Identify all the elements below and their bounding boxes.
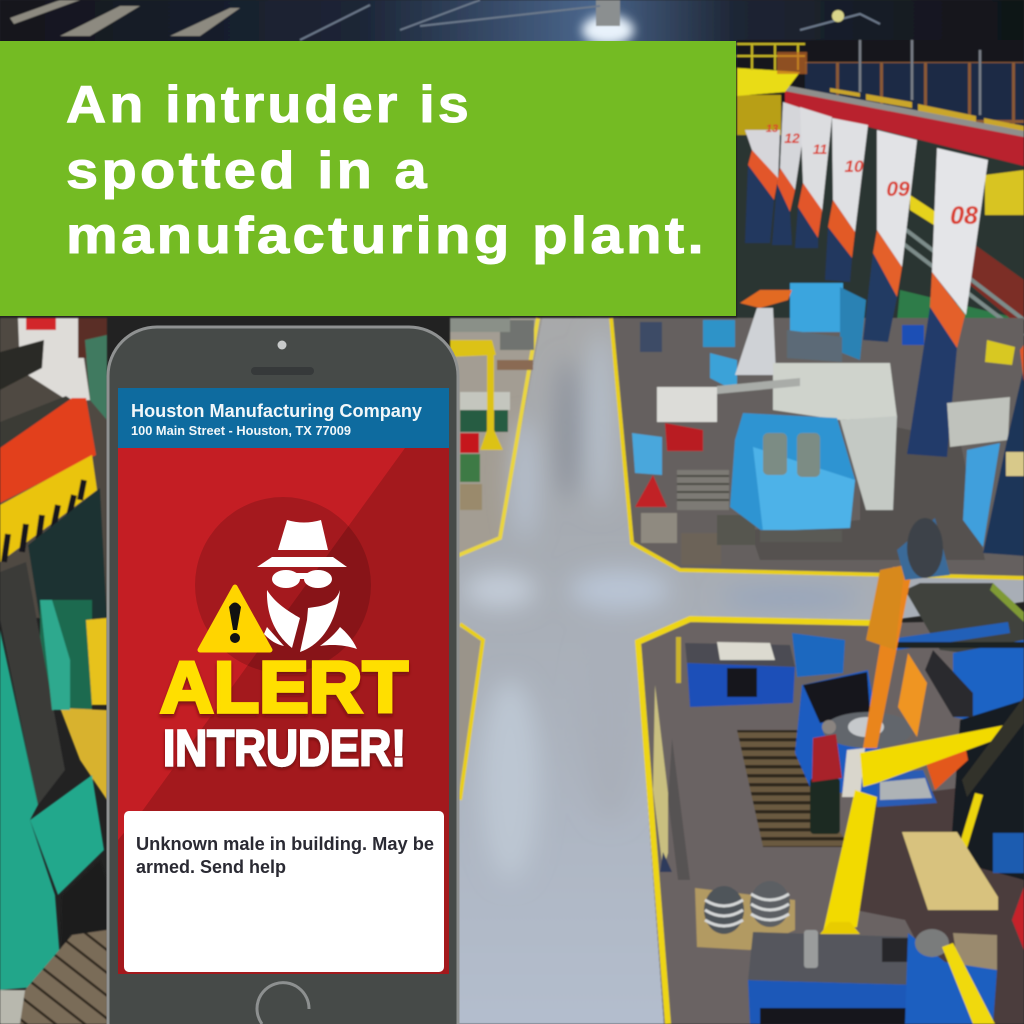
workbench with blue drawers xyxy=(676,633,845,707)
numbered factory columns xyxy=(737,95,988,457)
icon: warning triangle xyxy=(200,587,270,650)
lower right zone floor xyxy=(636,618,1024,1024)
left upper floor zone xyxy=(450,318,542,565)
column 09: 09 xyxy=(886,178,910,201)
column 10: 10 xyxy=(845,157,864,176)
company header: Houston Manufacturing Company xyxy=(131,401,422,421)
column 12: 12 xyxy=(784,130,800,146)
phone xyxy=(108,327,458,1024)
column 13 xyxy=(737,95,781,243)
column 08 xyxy=(907,148,988,457)
lower blue workbench xyxy=(748,929,997,1024)
column 11: 11 xyxy=(813,141,827,157)
pallet with metal rings xyxy=(695,881,795,950)
yellow crane platform xyxy=(737,44,807,96)
right side machines xyxy=(902,325,1024,556)
phone speaker xyxy=(251,367,314,375)
title text: spotted in a xyxy=(66,142,430,200)
barrier xyxy=(653,685,690,880)
machinery: upper middle xyxy=(450,318,534,510)
message box: armed. Send help xyxy=(136,857,286,877)
column 09 xyxy=(863,130,917,342)
red cabinet edge xyxy=(1012,887,1024,950)
upper gallery windows xyxy=(805,62,1024,140)
phone camera xyxy=(278,340,286,350)
column 11 xyxy=(795,107,832,248)
machinery: blue machines xyxy=(632,283,897,565)
interior behind columns xyxy=(737,95,1024,400)
icon: intruder xyxy=(257,520,357,652)
column 12 xyxy=(772,102,807,245)
message box xyxy=(124,811,444,972)
message box: Unknown male in building. May be xyxy=(136,834,434,854)
yellow jib crane xyxy=(820,697,1024,934)
lower-left floor sliver xyxy=(450,622,484,800)
aisle floor patches xyxy=(464,330,860,880)
ALERT text: ALERT xyxy=(160,648,408,728)
yellow floor lines xyxy=(452,318,538,558)
worker in red jacket xyxy=(810,720,865,834)
column 08: 08 xyxy=(950,202,978,230)
column 10 xyxy=(825,118,868,282)
title banner xyxy=(0,41,736,316)
title text xyxy=(66,76,707,265)
left: press machine xyxy=(0,318,107,1024)
floor grating mat xyxy=(737,730,850,847)
title text: manufacturing plant. xyxy=(66,207,707,265)
column 13: 13 xyxy=(766,123,778,135)
right upper zone floor xyxy=(610,318,1024,578)
company header: 100 Main Street - Houston, TX 77009 xyxy=(131,424,351,438)
ceiling xyxy=(0,0,1024,60)
red beam xyxy=(785,88,1024,166)
title text: An intruder is xyxy=(66,76,472,134)
company header xyxy=(118,388,449,448)
wooden block xyxy=(902,832,998,910)
INTRUDER text: INTRUDER! xyxy=(163,720,406,776)
large machine xyxy=(795,518,1024,880)
alert screen xyxy=(118,448,449,974)
central aisle xyxy=(450,318,1024,1024)
phone home button xyxy=(257,983,309,1024)
